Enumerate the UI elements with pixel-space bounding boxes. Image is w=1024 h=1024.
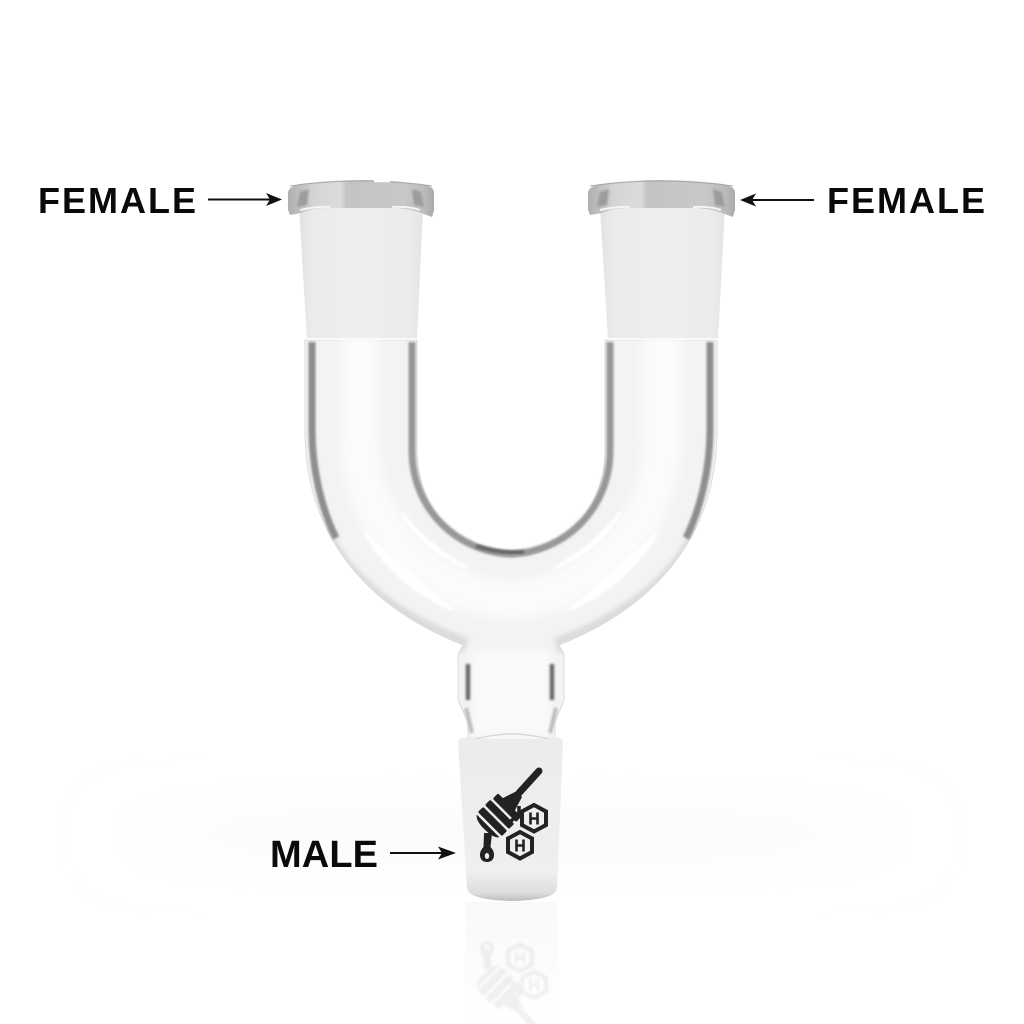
- right female joint: [588, 180, 735, 340]
- white tube core highlight: [338, 340, 684, 341]
- male joint: [458, 734, 563, 901]
- reflection of male joint: [464, 902, 560, 1024]
- arrow: female left: [208, 193, 282, 206]
- inner curve shadow band: [412, 342, 610, 554]
- right outer shadow band: [686, 342, 710, 538]
- label: female left: FEMALE: [38, 180, 196, 221]
- left female joint: [288, 180, 434, 340]
- icon: honey dipper logo: [473, 771, 546, 862]
- label: male: MALE: [270, 834, 378, 876]
- U-shaped glass tube: [305, 335, 717, 745]
- arrow: female right: [740, 194, 814, 206]
- arrow: male: [390, 846, 456, 860]
- clipped tube shading: [322, 335, 700, 646]
- white crescent highlights: [365, 513, 657, 610]
- glass adapter body: [288, 180, 735, 901]
- stem: [472, 650, 550, 736]
- background ground shadow: [112, 809, 912, 861]
- left outer shadow band: [312, 342, 336, 538]
- outer lower rim band: [322, 530, 700, 646]
- label: female right: FEMALE: [827, 180, 985, 221]
